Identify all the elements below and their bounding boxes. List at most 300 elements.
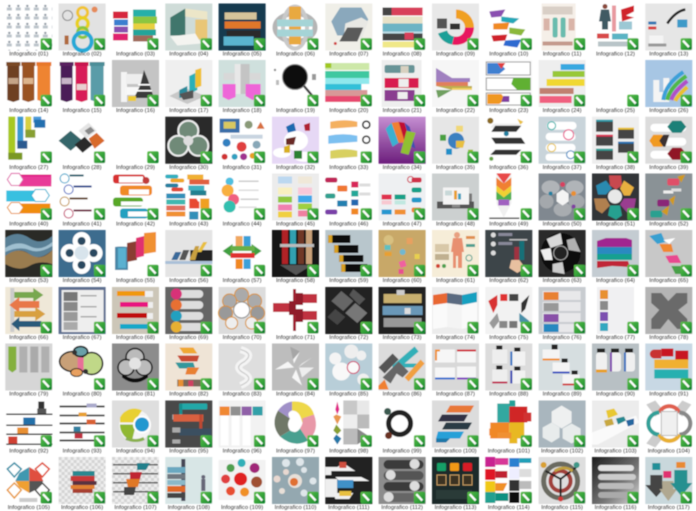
icon: badge 13 xyxy=(680,38,692,50)
icon: badge 85 xyxy=(360,378,372,390)
thumbnail: Infografico (55) xyxy=(112,230,159,284)
thumbnail: Infografico (110) xyxy=(272,457,319,511)
thumbnail: Infografico (100) xyxy=(432,400,479,455)
label 84: Infografico (84) xyxy=(276,392,315,398)
icon: badge 113 xyxy=(467,492,479,504)
thumbnail: Infografico (58) xyxy=(272,230,319,284)
thumbnail: Infografico (64) xyxy=(592,230,639,284)
thumbnail: Infografico (75) xyxy=(485,287,532,341)
thumbnail: Infografico (22) xyxy=(432,60,479,114)
thumbnail: Infografico (25) xyxy=(596,95,639,114)
icon: badge 26 xyxy=(680,95,692,107)
label 58: Infografico (58) xyxy=(276,278,315,284)
label 98: Infografico (98) xyxy=(329,449,368,455)
label 42: Infografico (42) xyxy=(116,222,155,228)
thumbnail: Infografico (24) xyxy=(539,60,586,114)
icon: badge 60 xyxy=(414,265,425,277)
icon: badge 45 xyxy=(307,208,319,220)
label 53: Infografico (53) xyxy=(9,278,48,284)
label 10: Infografico (10) xyxy=(489,52,528,58)
icon: badge 82 xyxy=(200,378,212,390)
thumbnail: Infografico (31) xyxy=(219,117,266,171)
icon: badge 79 xyxy=(40,378,52,390)
thumbnail: Infografico (81) xyxy=(112,344,159,398)
thumbnail: Infografico (11) xyxy=(542,4,585,58)
icon: badge 108 xyxy=(200,492,212,504)
label 61: Infografico (61) xyxy=(436,278,475,284)
thumbnail: Infografico (53) xyxy=(5,230,52,284)
label 27: Infografico (27) xyxy=(9,165,48,171)
icon: badge 54 xyxy=(94,265,105,277)
icon: badge 57 xyxy=(254,265,265,277)
icon: badge 17 xyxy=(200,95,212,107)
thumbnail: Infografico (08) xyxy=(379,4,426,58)
thumbnail: Infografico (104) xyxy=(645,400,692,455)
label 102: Infografico (102) xyxy=(541,449,583,455)
thumbnail: Infografico (111) xyxy=(325,457,372,511)
icon: badge 40 xyxy=(40,208,52,220)
label 91: Infografico (91) xyxy=(649,392,688,398)
thumbnail: Infografico (06) xyxy=(272,4,319,58)
thumbnail: Infografico (38) xyxy=(592,117,639,171)
thumbnail: Infografico (56) xyxy=(165,230,212,284)
label 62: Infografico (62) xyxy=(489,278,528,284)
icon: badge 112 xyxy=(414,492,425,504)
thumbnail: Infografico (89) xyxy=(539,344,586,398)
label 50: Infografico (50) xyxy=(543,222,582,228)
thumbnail: Infografico (83) xyxy=(219,344,266,398)
label 23: Infografico (23) xyxy=(489,108,528,114)
thumbnail: Infografico (61) xyxy=(432,230,479,284)
label 31: Infografico (31) xyxy=(223,165,262,171)
icon: badge 111 xyxy=(360,492,372,504)
thumbnail: Infografico (13) xyxy=(645,4,692,58)
icon: badge 37 xyxy=(574,151,585,163)
icon: badge 78 xyxy=(680,322,692,334)
label 13: Infografico (13) xyxy=(649,52,688,58)
icon: badge 107 xyxy=(147,492,159,504)
label 07: Infografico (07) xyxy=(329,52,368,58)
icon: badge 71 xyxy=(307,322,319,334)
thumbnail: Infografico (98) xyxy=(325,400,372,455)
label 51: Infografico (51) xyxy=(596,222,635,228)
icon: badge 16 xyxy=(147,95,159,107)
thumbnail: Infografico (112) xyxy=(379,457,426,511)
icon: badge 24 xyxy=(574,95,585,107)
thumbnail: Infografico (16) xyxy=(112,60,159,114)
icon: badge 48 xyxy=(467,208,479,220)
label 12: Infografico (12) xyxy=(596,52,635,58)
icon: badge 10 xyxy=(520,38,532,50)
thumbnail: Infografico (10) xyxy=(485,4,532,58)
icon: badge 106 xyxy=(94,492,105,504)
thumbnail: Infografico (36) xyxy=(485,117,532,171)
label 96: Infografico (96) xyxy=(223,449,262,455)
icon: badge 115 xyxy=(574,492,585,504)
thumbnail: Infografico (77) xyxy=(596,287,639,341)
icon: badge 63 xyxy=(574,265,585,277)
icon: badge 109 xyxy=(254,492,265,504)
label 87: Infografico (87) xyxy=(436,392,475,398)
thumbnail: Infografico (101) xyxy=(485,400,532,455)
label 47: Infografico (47) xyxy=(383,222,422,228)
thumbnail: Infografico (71) xyxy=(272,287,319,341)
icon: badge 80 xyxy=(94,378,105,390)
thumbnail: Infografico (47) xyxy=(379,174,426,228)
thumbnail: Infografico (72) xyxy=(325,287,372,341)
icon: badge 93 xyxy=(94,435,105,447)
icon: badge 116 xyxy=(627,492,639,504)
label 01: Infografico (01) xyxy=(9,52,48,58)
label 44: Infografico (44) xyxy=(223,222,262,228)
label 32: Infografico (32) xyxy=(276,165,315,171)
thumbnail: Infografico (32) xyxy=(272,117,319,171)
icon: badge 31 xyxy=(254,151,265,163)
label 02: Infografico (02) xyxy=(63,52,102,58)
thumbnail: Infografico (68) xyxy=(112,287,159,341)
icon: badge 52 xyxy=(680,208,692,220)
icon: badge 84 xyxy=(307,378,319,390)
icon: badge 03 xyxy=(147,38,159,50)
thumbnail: Infografico (57) xyxy=(219,230,266,284)
thumbnail: Infografico (66) xyxy=(5,287,52,341)
thumbnail: Infografico (79) xyxy=(5,344,52,398)
label 40: Infografico (40) xyxy=(9,222,48,228)
label 65: Infografico (65) xyxy=(649,278,688,284)
icon: badge 114 xyxy=(520,492,532,504)
label 83: Infografico (83) xyxy=(223,392,262,398)
thumbnail: Infografico (48) xyxy=(432,174,479,228)
label 100: Infografico (100) xyxy=(434,449,477,455)
thumbnail: Infografico (49) xyxy=(485,174,532,228)
thumbnail: Infografico (70) xyxy=(219,287,266,341)
label 29: Infografico (29) xyxy=(116,165,155,171)
icon: badge 07 xyxy=(360,38,372,50)
thumbnail: Infografico (69) xyxy=(165,287,212,341)
thumbnail: Infografico (85) xyxy=(325,344,372,398)
icon: badge 25 xyxy=(627,95,639,107)
label 04: Infografico (04) xyxy=(169,52,208,58)
icon: badge 59 xyxy=(360,265,372,277)
label 03: Infografico (03) xyxy=(116,52,155,58)
thumbnail: Infografico (50) xyxy=(539,174,586,228)
thumbnail: Infografico (87) xyxy=(432,344,479,398)
label 14: Infografico (14) xyxy=(9,108,48,114)
thumbnail: Infografico (115) xyxy=(539,457,586,511)
icon: badge 99 xyxy=(414,435,425,447)
thumbnail: Infografico (74) xyxy=(432,287,479,341)
label 20: Infografico (20) xyxy=(329,108,368,114)
icon: badge 65 xyxy=(680,265,692,277)
label 30: Infografico (30) xyxy=(169,165,208,171)
icon: badge 117 xyxy=(680,492,692,504)
icon: badge 05 xyxy=(254,38,265,50)
thumbnail: Infografico (84) xyxy=(272,344,319,398)
icon: badge 42 xyxy=(147,208,159,220)
label 15: Infografico (15) xyxy=(63,108,102,114)
label 66: Infografico (66) xyxy=(9,335,48,341)
icon: badge 67 xyxy=(94,322,105,334)
thumbnail: Infografico (82) xyxy=(165,344,212,398)
icon: badge 44 xyxy=(254,208,265,220)
icon: badge 15 xyxy=(94,95,105,107)
icon: badge 87 xyxy=(467,378,479,390)
label 49: Infografico (49) xyxy=(489,222,528,228)
thumbnail: Infografico (20) xyxy=(325,60,372,114)
thumbnail: Infografico (33) xyxy=(325,117,372,171)
thumbnail: Infografico (108) xyxy=(165,457,212,511)
label 85: Infografico (85) xyxy=(329,392,368,398)
thumbnail: Infografico (105) xyxy=(5,457,52,511)
icon: badge 11 xyxy=(574,38,585,50)
icon: badge 46 xyxy=(360,208,372,220)
thumbnail: Infografico (91) xyxy=(645,344,692,398)
thumbnail: Infografico (114) xyxy=(485,457,532,511)
icon: badge 18 xyxy=(254,95,265,107)
icon: badge 06 xyxy=(307,38,319,50)
label 05: Infografico (05) xyxy=(223,52,262,58)
icon: badge 28 xyxy=(94,151,105,163)
thumbnail: Infografico (29) xyxy=(116,151,159,171)
label 46: Infografico (46) xyxy=(329,222,368,228)
thumbnail: Infografico (95) xyxy=(165,400,212,455)
icon: badge 19 xyxy=(307,95,319,107)
label 57: Infografico (57) xyxy=(223,278,262,284)
thumbnail: Infografico (76) xyxy=(539,287,586,341)
icon: badge 94 xyxy=(147,435,159,447)
label 35: Infografico (35) xyxy=(436,165,475,171)
thumbnail: Infografico (45) xyxy=(272,174,319,228)
label 77: Infografico (77) xyxy=(596,335,635,341)
label 101: Infografico (101) xyxy=(488,449,530,455)
label 52: Infografico (52) xyxy=(649,222,688,228)
icon: badge 56 xyxy=(200,265,212,277)
label 33: Infografico (33) xyxy=(329,165,368,171)
label 68: Infografico (68) xyxy=(116,335,155,341)
icon: badge 74 xyxy=(467,322,479,334)
label 26: Infografico (26) xyxy=(649,108,688,114)
thumbnail: Infografico (37) xyxy=(539,117,586,171)
label 72: Infografico (72) xyxy=(329,335,368,341)
thumbnail: Infografico (21) xyxy=(382,60,425,114)
thumbnail: Infografico (60) xyxy=(379,230,426,284)
thumbnail: Infografico (34) xyxy=(379,117,426,171)
label 70: Infografico (70) xyxy=(223,335,262,341)
icon: badge 51 xyxy=(627,208,639,220)
thumbnail: Infografico (109) xyxy=(219,459,266,511)
icon: badge 95 xyxy=(200,435,212,447)
label 43: Infografico (43) xyxy=(169,222,208,228)
icon: badge 86 xyxy=(414,378,425,390)
icon: badge 110 xyxy=(307,492,319,504)
thumbnail: Infografico (113) xyxy=(432,457,479,511)
icon: badge 27 xyxy=(40,151,52,163)
thumbnail: Infografico (65) xyxy=(645,230,692,284)
icon: badge 64 xyxy=(627,265,639,277)
label 19: Infografico (19) xyxy=(276,108,315,114)
icon: badge 02 xyxy=(94,38,105,50)
icon: badge 62 xyxy=(520,265,532,277)
icon: badge 77 xyxy=(627,322,639,334)
icon: badge 75 xyxy=(520,322,532,334)
thumbnail: Infografico (14) xyxy=(5,60,52,114)
icon: badge 47 xyxy=(414,208,425,220)
thumbnail: Infografico (107) xyxy=(112,457,159,511)
thumbnail: Infografico (86) xyxy=(379,344,426,398)
icon: badge 30 xyxy=(200,151,212,163)
icon: badge 04 xyxy=(200,38,212,50)
icon: badge 01 xyxy=(40,38,52,50)
thumbnail: Infografico (93) xyxy=(59,400,106,455)
label 56: Infografico (56) xyxy=(169,278,208,284)
thumbnail: Infografico (01) xyxy=(5,4,52,58)
icon: badge 22 xyxy=(467,95,479,107)
icon: badge 69 xyxy=(200,322,212,334)
label 103: Infografico (103) xyxy=(594,449,637,455)
icon: badge 88 xyxy=(520,378,532,390)
label 80: Infografico (80) xyxy=(63,392,102,398)
thumbnail: Infografico (28) xyxy=(59,117,106,171)
thumbnail: Infografico (05) xyxy=(219,4,266,58)
label 24: Infografico (24) xyxy=(543,108,582,114)
label 76: Infografico (76) xyxy=(543,335,582,341)
label 54: Infografico (54) xyxy=(63,278,102,284)
thumbnail: Infografico (15) xyxy=(59,60,106,114)
label 73: Infografico (73) xyxy=(383,335,422,341)
label 97: Infografico (97) xyxy=(276,449,315,455)
label 18: Infografico (18) xyxy=(223,108,262,114)
thumbnail: Infografico (73) xyxy=(379,287,426,341)
icon: badge 76 xyxy=(574,322,585,334)
label 21: Infografico (21) xyxy=(383,108,422,114)
label 95: Infografico (95) xyxy=(169,449,208,455)
thumbnail: Infografico (54) xyxy=(59,230,106,284)
icon: badge 83 xyxy=(254,378,265,390)
icon: badge 33 xyxy=(360,151,372,163)
thumbnail: Infografico (52) xyxy=(645,174,692,228)
thumbnail: Infografico (116) xyxy=(592,457,639,511)
thumbnail: Infografico (88) xyxy=(485,344,532,398)
thumbnail: Infografico (90) xyxy=(592,344,639,398)
icon: badge 14 xyxy=(40,95,52,107)
thumbnail: Infografico (17) xyxy=(165,60,212,114)
icon: badge 68 xyxy=(147,322,159,334)
label 36: Infografico (36) xyxy=(489,165,528,171)
label 67: Infografico (67) xyxy=(63,335,102,341)
thumbnail: Infografico (27) xyxy=(5,117,52,171)
label 22: Infografico (22) xyxy=(436,108,475,114)
thumbnail: Infografico (97) xyxy=(272,400,319,455)
icon: badge 73 xyxy=(414,322,425,334)
label 59: Infografico (59) xyxy=(329,278,368,284)
icon: badge 98 xyxy=(360,435,372,447)
icon: badge 97 xyxy=(307,435,319,447)
icon: badge 53 xyxy=(40,265,52,277)
thumbnail: Infografico (117) xyxy=(645,457,692,511)
thumbnail: Infografico (09) xyxy=(432,4,479,58)
label 34: Infografico (34) xyxy=(383,165,422,171)
label 06: Infografico (06) xyxy=(276,52,315,58)
thumbnail: Infografico (94) xyxy=(112,400,159,455)
label 48: Infografico (48) xyxy=(436,222,475,228)
thumbnail: Infografico (43) xyxy=(165,174,212,228)
icon: badge 49 xyxy=(520,208,532,220)
label 86: Infografico (86) xyxy=(383,392,422,398)
label 38: Infografico (38) xyxy=(596,165,635,171)
icon: badge 90 xyxy=(627,378,639,390)
thumbnail: Infografico (78) xyxy=(645,287,692,341)
thumbnail: Infografico (35) xyxy=(432,117,479,171)
label 92: Infografico (92) xyxy=(9,449,48,455)
label 81: Infografico (81) xyxy=(116,392,155,398)
thumbnail: Infografico (03) xyxy=(112,4,159,58)
icon: badge 20 xyxy=(360,95,372,107)
icon: badge 66 xyxy=(40,322,52,334)
icon: badge 91 xyxy=(680,378,692,390)
thumbnail: Infografico (102) xyxy=(539,400,586,455)
thumbnail: Infografico (07) xyxy=(325,4,372,58)
thumbnail: Infografico (106) xyxy=(59,457,106,511)
icon: badge 100 xyxy=(467,435,479,447)
icon: badge 21 xyxy=(414,95,425,107)
thumbnail: Infografico (04) xyxy=(165,4,212,58)
label 09: Infografico (09) xyxy=(436,52,475,58)
icon: badge 34 xyxy=(414,151,425,163)
label 93: Infografico (93) xyxy=(63,449,102,455)
thumbnail: Infografico (59) xyxy=(325,230,372,284)
thumbnail: Infografico (19) xyxy=(272,60,319,114)
label 78: Infografico (78) xyxy=(649,335,688,341)
thumbnail: Infografico (40) xyxy=(5,174,52,228)
thumbnail: Infografico (92) xyxy=(5,400,52,455)
icon: badge 38 xyxy=(627,151,639,163)
thumbnail: Infografico (99) xyxy=(379,400,426,455)
label 60: Infografico (60) xyxy=(383,278,422,284)
label 45: Infografico (45) xyxy=(276,222,315,228)
icon: badge 58 xyxy=(307,265,319,277)
icon: badge 55 xyxy=(147,265,159,277)
thumbnail: Infografico (18) xyxy=(219,60,266,114)
label 41: Infografico (41) xyxy=(63,222,102,228)
label 39: Infografico (39) xyxy=(649,165,688,171)
label 63: Infografico (63) xyxy=(543,278,582,284)
icon: badge 96 xyxy=(254,435,265,447)
icon: badge 105 xyxy=(40,492,52,504)
label 28: Infografico (28) xyxy=(63,165,102,171)
thumbnail: Infografico (46) xyxy=(325,174,372,228)
icon: badge 72 xyxy=(360,322,372,334)
icon: badge 103 xyxy=(627,435,639,447)
icon: badge 104 xyxy=(680,435,692,447)
icon: badge 39 xyxy=(680,151,692,163)
icon: badge 89 xyxy=(574,378,585,390)
label 75: Infografico (75) xyxy=(489,335,528,341)
thumbnail: Infografico (30) xyxy=(165,117,212,171)
label 104: Infografico (104) xyxy=(648,449,690,455)
icon: badge 50 xyxy=(574,208,585,220)
icon: badge 08 xyxy=(414,38,425,50)
thumbnail: Infografico (80) xyxy=(59,344,106,398)
icon: badge 101 xyxy=(520,435,532,447)
thumbnail: Infografico (41) xyxy=(59,174,106,228)
icon: badge 29 xyxy=(147,151,159,163)
thumbnail: Infografico (62) xyxy=(485,230,532,284)
icon: badge 92 xyxy=(40,435,52,447)
thumbnail: Infografico (02) xyxy=(59,4,106,58)
icon: badge 43 xyxy=(200,208,212,220)
thumbnail: Infografico (103) xyxy=(592,400,639,455)
label 88: Infografico (88) xyxy=(489,392,528,398)
